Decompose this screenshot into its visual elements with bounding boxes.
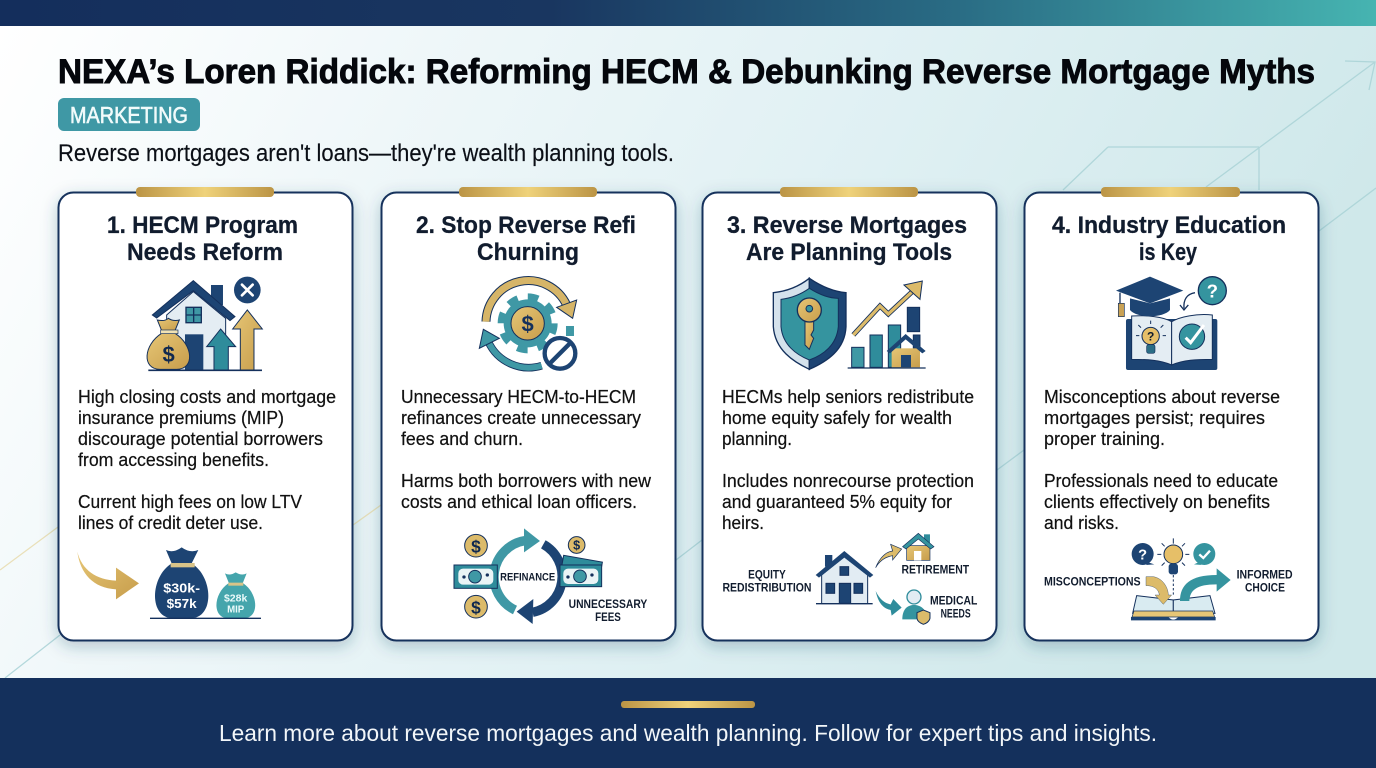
icon: fee money bags: $28k xyxy=(224,594,248,605)
text block: insurance premiums (MIP) xyxy=(78,407,284,428)
icon: fee money bags: $57k xyxy=(167,596,197,611)
top banner xyxy=(0,0,1376,26)
heading: is Key xyxy=(1139,239,1198,266)
text block: High closing costs and mortgage xyxy=(78,386,336,407)
icon: equity redistribution diagram: REDISTRIBUTION xyxy=(722,581,811,594)
subtitle: Reverse mortgages aren't loans—they're wealth planning tools. xyxy=(58,140,674,167)
heading: Are Planning Tools xyxy=(746,239,952,266)
icon: refinance cycle diagram: FEES xyxy=(595,611,621,624)
icon: equity redistribution diagram: EQUITY xyxy=(748,569,786,582)
icon: misconceptions to informed choice diagram: MISCONCEPTIONS xyxy=(1044,575,1141,588)
icon: graduation cap and open book: ? xyxy=(1207,280,1218,301)
heading: 4. Industry Education xyxy=(1052,212,1286,239)
text block: and guaranteed 5% equity for xyxy=(722,491,952,512)
icon: equity redistribution diagram xyxy=(722,533,977,624)
icon: refinance cycle diagram: UNNECESSARY xyxy=(569,598,648,611)
text block: discourage potential borrowers xyxy=(78,428,323,449)
text block: Misconceptions about reverse xyxy=(1044,386,1280,407)
icon: misconceptions to informed choice diagram: CHOICE xyxy=(1245,581,1285,594)
call to action: Learn more about reverse mortgages and wealth planning. Follow for expert tips and insights. xyxy=(219,720,1157,746)
heading xyxy=(107,212,298,266)
text block: Current high fees on low LTV xyxy=(78,491,303,512)
heading xyxy=(416,212,636,266)
text block: HECMs help seniors redistribute xyxy=(722,386,974,407)
heading xyxy=(1052,212,1286,266)
icon: graduation cap and open book: ? xyxy=(1147,330,1154,344)
heading: Churning xyxy=(477,239,579,266)
icon: house with money bag and rising arrows: $ xyxy=(163,342,175,367)
text block: proper training. xyxy=(1044,428,1165,449)
text block: lines of credit deter use. xyxy=(78,512,263,533)
icon: refinance cycle diagram xyxy=(454,528,648,624)
category badge: MARKETING xyxy=(70,102,188,128)
text block: planning. xyxy=(722,428,792,449)
text block: heirs. xyxy=(722,512,764,533)
text block xyxy=(1044,386,1280,533)
text block: clients effectively on benefits xyxy=(1044,491,1270,512)
text block: Includes nonrecourse protection xyxy=(722,470,974,491)
icon: refinance cycle diagram: REFINANCE xyxy=(500,572,555,584)
text block: and risks. xyxy=(1044,512,1119,533)
category badge xyxy=(58,98,200,131)
icon: refinance cycle diagram: $ xyxy=(471,536,481,556)
text block: Professionals need to educate xyxy=(1044,470,1278,491)
icon: refinance cycle diagram: $ xyxy=(471,597,481,617)
text block xyxy=(722,386,974,533)
title: NEXA’s Loren Riddick: Reforming HECM & Debunking Reverse Mortgage Myths xyxy=(58,53,1315,91)
text block: Harms both borrowers with new xyxy=(401,470,652,491)
heading xyxy=(727,212,967,266)
heading: 1. HECM Program xyxy=(107,212,298,239)
panel: 1. HECM Program Needs Reform xyxy=(58,187,352,640)
heading: Needs Reform xyxy=(127,239,283,266)
icon: misconceptions to informed choice diagram xyxy=(1044,538,1293,620)
icon: fee money bags xyxy=(77,547,261,618)
icon: fee money bags: $30k- xyxy=(163,580,200,595)
text block xyxy=(401,386,652,512)
text block: refinances create unnecessary xyxy=(401,407,642,428)
icon: gear with circular arrows and stop sign: $ xyxy=(522,311,534,336)
icon: misconceptions to informed choice diagram: ? xyxy=(1138,547,1147,563)
text block: costs and ethical loan officers. xyxy=(401,491,637,512)
text block: fees and churn. xyxy=(401,428,523,449)
panel: 4. Industry Education is Key xyxy=(1024,187,1318,640)
text block: Unnecessary HECM-to-HECM xyxy=(401,386,636,407)
icon: refinance cycle diagram: $ xyxy=(573,539,580,553)
heading: 2. Stop Reverse Refi xyxy=(416,212,636,239)
icon: shield with key and growth chart xyxy=(773,278,926,369)
text block xyxy=(78,386,336,533)
icon: equity redistribution diagram: RETIREMENT xyxy=(901,564,969,577)
icon: equity redistribution diagram: MEDICAL xyxy=(930,595,977,608)
icon: misconceptions to informed choice diagram: INFORMED xyxy=(1237,569,1293,582)
icon: house with money bag and rising arrows xyxy=(147,277,262,370)
text block: mortgages persist; requires xyxy=(1044,407,1265,428)
footer banner xyxy=(0,678,1376,768)
text block: home equity safely for wealth xyxy=(722,407,952,428)
heading: 3. Reverse Mortgages xyxy=(727,212,967,239)
panel: 2. Stop Reverse Refi Churning xyxy=(382,187,676,640)
icon: equity redistribution diagram: NEEDS xyxy=(941,607,971,620)
panel: 3. Reverse Mortgages Are Planning Tools xyxy=(702,187,996,640)
text block: from accessing benefits. xyxy=(78,449,269,470)
icon: gear with circular arrows and stop sign xyxy=(479,281,577,369)
icon: graduation cap and open book xyxy=(1116,277,1226,370)
icon: fee money bags: MIP xyxy=(227,604,245,615)
